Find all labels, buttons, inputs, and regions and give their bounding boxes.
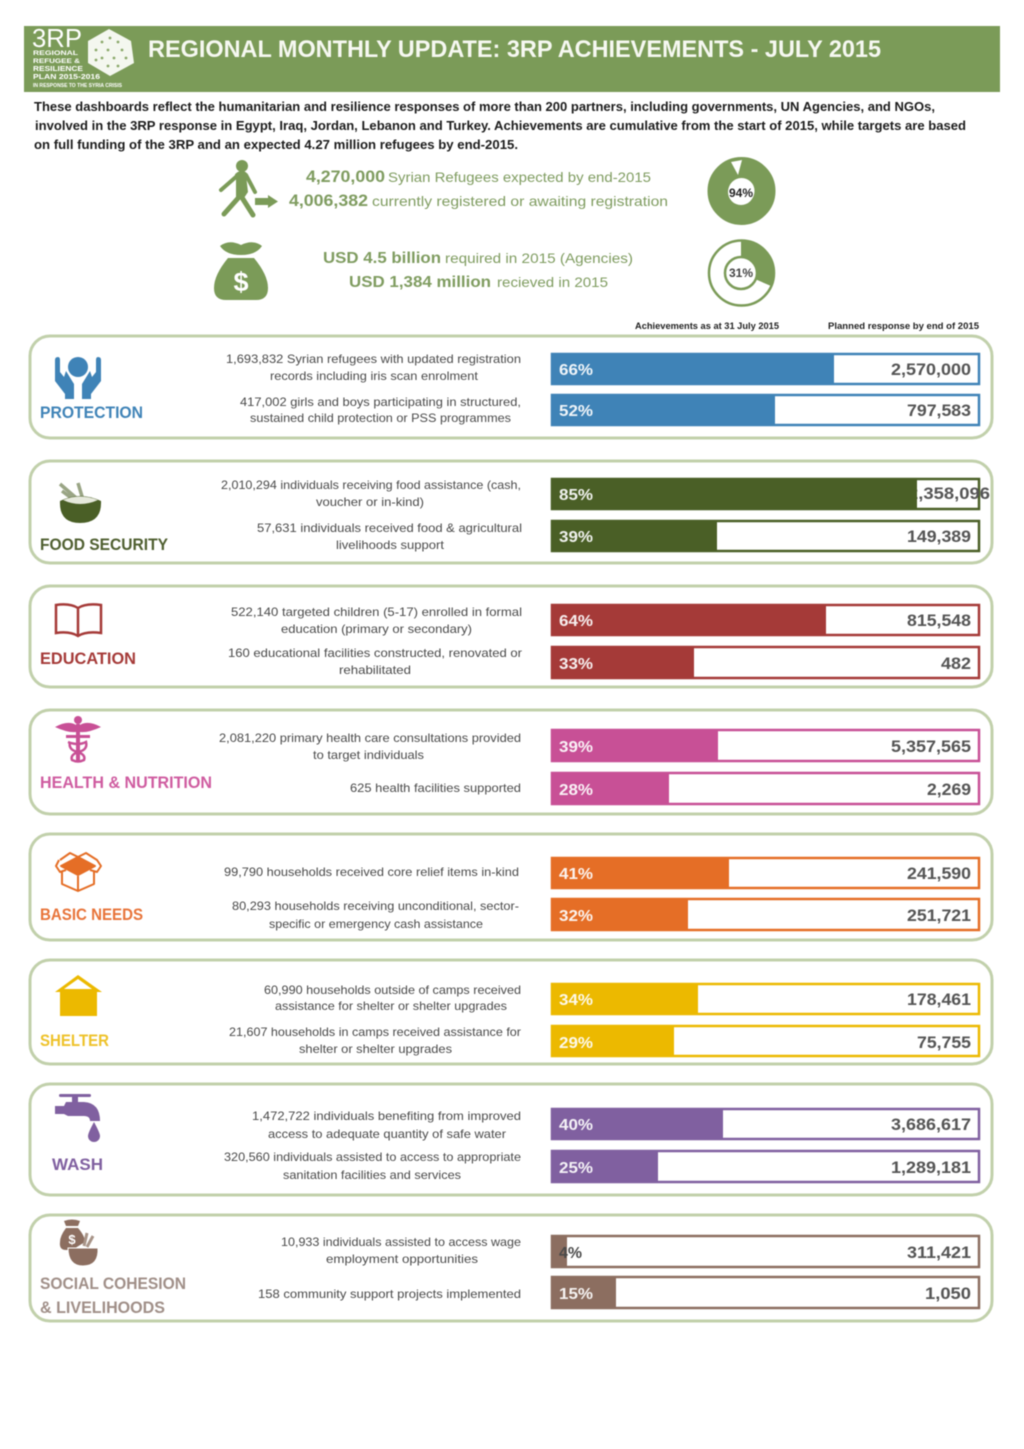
descriptions: voucher or in-kind)	[316, 495, 424, 509]
descriptions: sanitation facilities and services	[283, 1168, 461, 1182]
label: & LIVELIHOODS	[40, 1298, 165, 1317]
descriptions	[224, 1109, 521, 1182]
bar: 40% of 3,686,617: 3,686,617	[891, 1115, 971, 1134]
bar: 34% of 178,461: 178,461	[907, 990, 971, 1009]
label: SHELTER	[40, 1031, 109, 1050]
descriptions: records including iris scan enrolment	[270, 369, 479, 383]
descriptions	[229, 983, 521, 1056]
descriptions: 1,693,832 Syrian refugees with updated registration	[226, 352, 521, 366]
descriptions: 320,560 individuals assisted to access to appropriate	[224, 1150, 521, 1164]
bar: 4% of 311,421: 4%	[559, 1245, 582, 1262]
refugee figures: currently registered or awaiting registration	[372, 193, 668, 209]
bar: 85% of 2,358,096	[551, 478, 990, 510]
descriptions: 21,607 households in camps received assistance for	[229, 1025, 521, 1039]
descriptions: 60,990 households outside of camps received	[264, 983, 521, 997]
donut: 31%	[709, 240, 774, 306]
bar: 28% of 2,269: 2,269	[927, 780, 971, 799]
bar: 15% of 1,050: 15%	[559, 1286, 593, 1303]
panel: protection	[30, 336, 992, 438]
refugee figures: Syrian Refugees expected by end-2015	[388, 169, 651, 185]
icon: money bag and bowl: $	[68, 1232, 76, 1247]
descriptions: 1,472,722 individuals benefiting from improved	[252, 1109, 521, 1123]
bar: 15% of 1,050: 1,050	[925, 1284, 971, 1303]
donut: 94%	[718, 160, 765, 214]
bar: 32% of 251,721: 32%	[559, 908, 593, 925]
bar: 39% of 149,389	[551, 520, 979, 552]
bar: 33% of 482: 482	[941, 654, 971, 673]
bar: 32% of 251,721: 251,721	[907, 906, 971, 925]
bar: 15% of 1,050	[551, 1276, 979, 1309]
bar: 41% of 241,590: 41%	[559, 866, 593, 883]
descriptions: 158 community support projects implemented	[258, 1287, 521, 1301]
logo: 3RP	[32, 23, 134, 89]
descriptions: 10,933 individuals assisted to access wage	[281, 1235, 521, 1249]
descriptions: rehabilitated	[339, 663, 411, 677]
icon: open box	[56, 853, 101, 891]
funding figures: USD 4.5 billion	[323, 250, 441, 267]
logo: 3RP: REFUGEE &	[33, 59, 81, 65]
descriptions: 99,790 households received core relief items in-kind	[224, 865, 519, 879]
bar: 64% of 815,548: 64%	[559, 613, 593, 630]
descriptions	[224, 865, 519, 931]
logo: 3RP: IN RESPONSE TO THE SYRIA CRISIS	[33, 83, 123, 89]
bar: 39% of 5,357,565: 5,357,565	[891, 737, 971, 756]
descriptions: sustained child protection or PSS programmes	[250, 411, 511, 425]
panel: basic needs	[30, 834, 992, 940]
bar: 33% of 482: 33%	[559, 656, 593, 673]
bar: 52% of 797,583: 797,583	[907, 401, 971, 420]
bar: 66% of 2,570,000: 2,570,000	[891, 360, 971, 379]
descriptions: 2,081,220 primary health care consultations provided	[219, 731, 521, 745]
label: SOCIAL COHESION	[40, 1274, 186, 1293]
panel: wash	[30, 1084, 992, 1195]
logo: 3RP: PLAN 2015-2016	[33, 74, 100, 81]
label	[40, 1274, 186, 1317]
panel: health and nutrition	[30, 710, 992, 814]
label: FOOD SECURITY	[40, 535, 169, 554]
bar: 25% of 1,289,181: 1,289,181	[891, 1158, 971, 1177]
descriptions: livelihoods support	[336, 538, 445, 552]
bar: 85% of 2,358,096: 85%	[559, 487, 593, 504]
descriptions	[226, 352, 521, 425]
icon: protective hands	[55, 357, 101, 399]
bar: 64% of 815,548	[551, 604, 979, 636]
column headings: Achievements as at 31 July 2015	[635, 321, 780, 332]
descriptions: access to adequate quantity of safe water	[268, 1127, 506, 1141]
bar: 52% of 797,583: 52%	[559, 403, 593, 420]
panel: education	[30, 586, 992, 687]
bar: 39% of 149,389: 149,389	[907, 527, 971, 546]
label: EDUCATION	[40, 649, 136, 668]
descriptions: shelter or shelter upgrades	[299, 1042, 452, 1056]
intro paragraph: These dashboards reflect the humanitarian and resilience responses of more than 200 partners, including governments, UN Agencies, and NGOs,	[34, 99, 935, 114]
column headings: Planned response by end of 2015	[828, 321, 980, 332]
panel: food security	[30, 461, 992, 563]
intro paragraph	[34, 99, 966, 152]
bar: 52% of 797,583	[551, 394, 979, 426]
bar: 64% of 815,548: 815,548	[907, 611, 971, 630]
column headings	[635, 321, 980, 332]
bar: 4% of 311,421	[551, 1235, 979, 1268]
icon: money bag	[214, 242, 268, 300]
descriptions	[221, 478, 522, 552]
bar: 29% of 75,755: 75,755	[917, 1033, 971, 1052]
refugee figures	[289, 168, 668, 210]
bar: 39% of 149,389: 39%	[559, 529, 593, 546]
icon: bowl with wheat	[60, 483, 101, 523]
label: WASH	[52, 1155, 103, 1174]
descriptions: 2,010,294 individuals receiving food assistance (cash,	[221, 478, 521, 492]
bar: 32% of 251,721	[551, 898, 979, 931]
descriptions: 625 health facilities supported	[350, 781, 521, 795]
descriptions: assistance for shelter or shelter upgrades	[275, 999, 507, 1013]
panel: shelter	[30, 960, 992, 1064]
funding figures	[323, 250, 633, 291]
bar: 29% of 75,755	[551, 1025, 979, 1057]
bar: 25% of 1,289,181: 25%	[559, 1160, 593, 1177]
icon: house	[55, 975, 102, 1016]
funding figures: USD 1,384 million	[349, 274, 491, 291]
descriptions: to target individuals	[313, 748, 424, 762]
logo: 3RP: REGIONAL	[33, 51, 78, 57]
bar: 28% of 2,269: 28%	[559, 782, 593, 799]
bar: 41% of 241,590	[551, 857, 979, 889]
funding figures: required in 2015 (Agencies)	[445, 250, 633, 266]
icon: money bag and bowl	[60, 1220, 98, 1266]
refugee figures: 4,270,000	[306, 168, 385, 186]
descriptions	[219, 731, 521, 795]
bar: 41% of 241,590: 241,590	[907, 864, 971, 883]
bar: 34% of 178,461: 34%	[559, 992, 593, 1009]
icon: money bag: $	[233, 267, 249, 297]
donut: 31%: 31%	[729, 266, 753, 280]
label: BASIC NEEDS	[40, 905, 143, 924]
label: HEALTH & NUTRITION	[40, 773, 212, 792]
descriptions: 522,140 targeted children (5-17) enrolled in formal	[231, 605, 522, 619]
descriptions	[228, 605, 522, 677]
bar: 66% of 2,570,000: 66%	[559, 362, 593, 379]
bar: 29% of 75,755: 29%	[559, 1035, 593, 1052]
intro paragraph: involved in the 3RP response in Egypt, Iraq, Jordan, Lebanon and Turkey. Achievements are cumulative from the start of 2015, while targets are based	[35, 118, 966, 133]
bar: 66% of 2,570,000	[551, 353, 979, 385]
panel: social cohesion and livelihoods	[30, 1215, 992, 1321]
bar: 28% of 2,269	[551, 772, 979, 805]
bar: 40% of 3,686,617	[551, 1108, 979, 1140]
icon: walking refugee with arrow	[221, 160, 278, 215]
bar: 33% of 482	[551, 646, 979, 679]
bar: 85% of 2,358,096: 2,358,096	[908, 484, 990, 503]
logo: 3RP: RESILIENCE	[33, 66, 83, 73]
descriptions: 417,002 girls and boys participating in structured,	[240, 395, 521, 409]
refugee figures: 4,006,382	[289, 192, 368, 210]
bar: 34% of 178,461	[551, 983, 979, 1015]
bar: 4% of 311,421: 311,421	[907, 1243, 971, 1262]
bar: 25% of 1,289,181	[551, 1150, 979, 1183]
descriptions: 160 educational facilities constructed, renovated or	[228, 646, 522, 660]
header banner	[24, 23, 1000, 92]
intro paragraph: on full funding of the 3RP and an expected 4.27 million refugees by end-2015.	[34, 137, 518, 152]
bar: 39% of 5,357,565: 39%	[559, 739, 593, 756]
descriptions: 57,631 individuals received food & agricultural	[257, 521, 522, 535]
title: REGIONAL MONTHLY UPDATE: 3RP ACHIEVEMENTS - JULY 2015	[148, 36, 881, 63]
icon: open book	[56, 604, 101, 636]
descriptions: 80,293 households receiving unconditional, sector-	[232, 899, 519, 913]
descriptions: education (primary or secondary)	[281, 622, 472, 636]
bar: 40% of 3,686,617: 40%	[559, 1117, 593, 1134]
descriptions	[258, 1235, 521, 1301]
descriptions: specific or emergency cash assistance	[269, 917, 483, 931]
funding figures: recieved in 2015	[497, 274, 608, 290]
icon: water tap	[55, 1094, 100, 1142]
bar: 39% of 5,357,565	[551, 729, 979, 762]
descriptions: employment opportunities	[326, 1252, 478, 1266]
donut: 94%: 94%	[729, 186, 753, 200]
logo: 3RP: 3RP	[32, 23, 82, 53]
icon: caduceus	[55, 716, 101, 762]
label: PROTECTION	[40, 403, 143, 422]
